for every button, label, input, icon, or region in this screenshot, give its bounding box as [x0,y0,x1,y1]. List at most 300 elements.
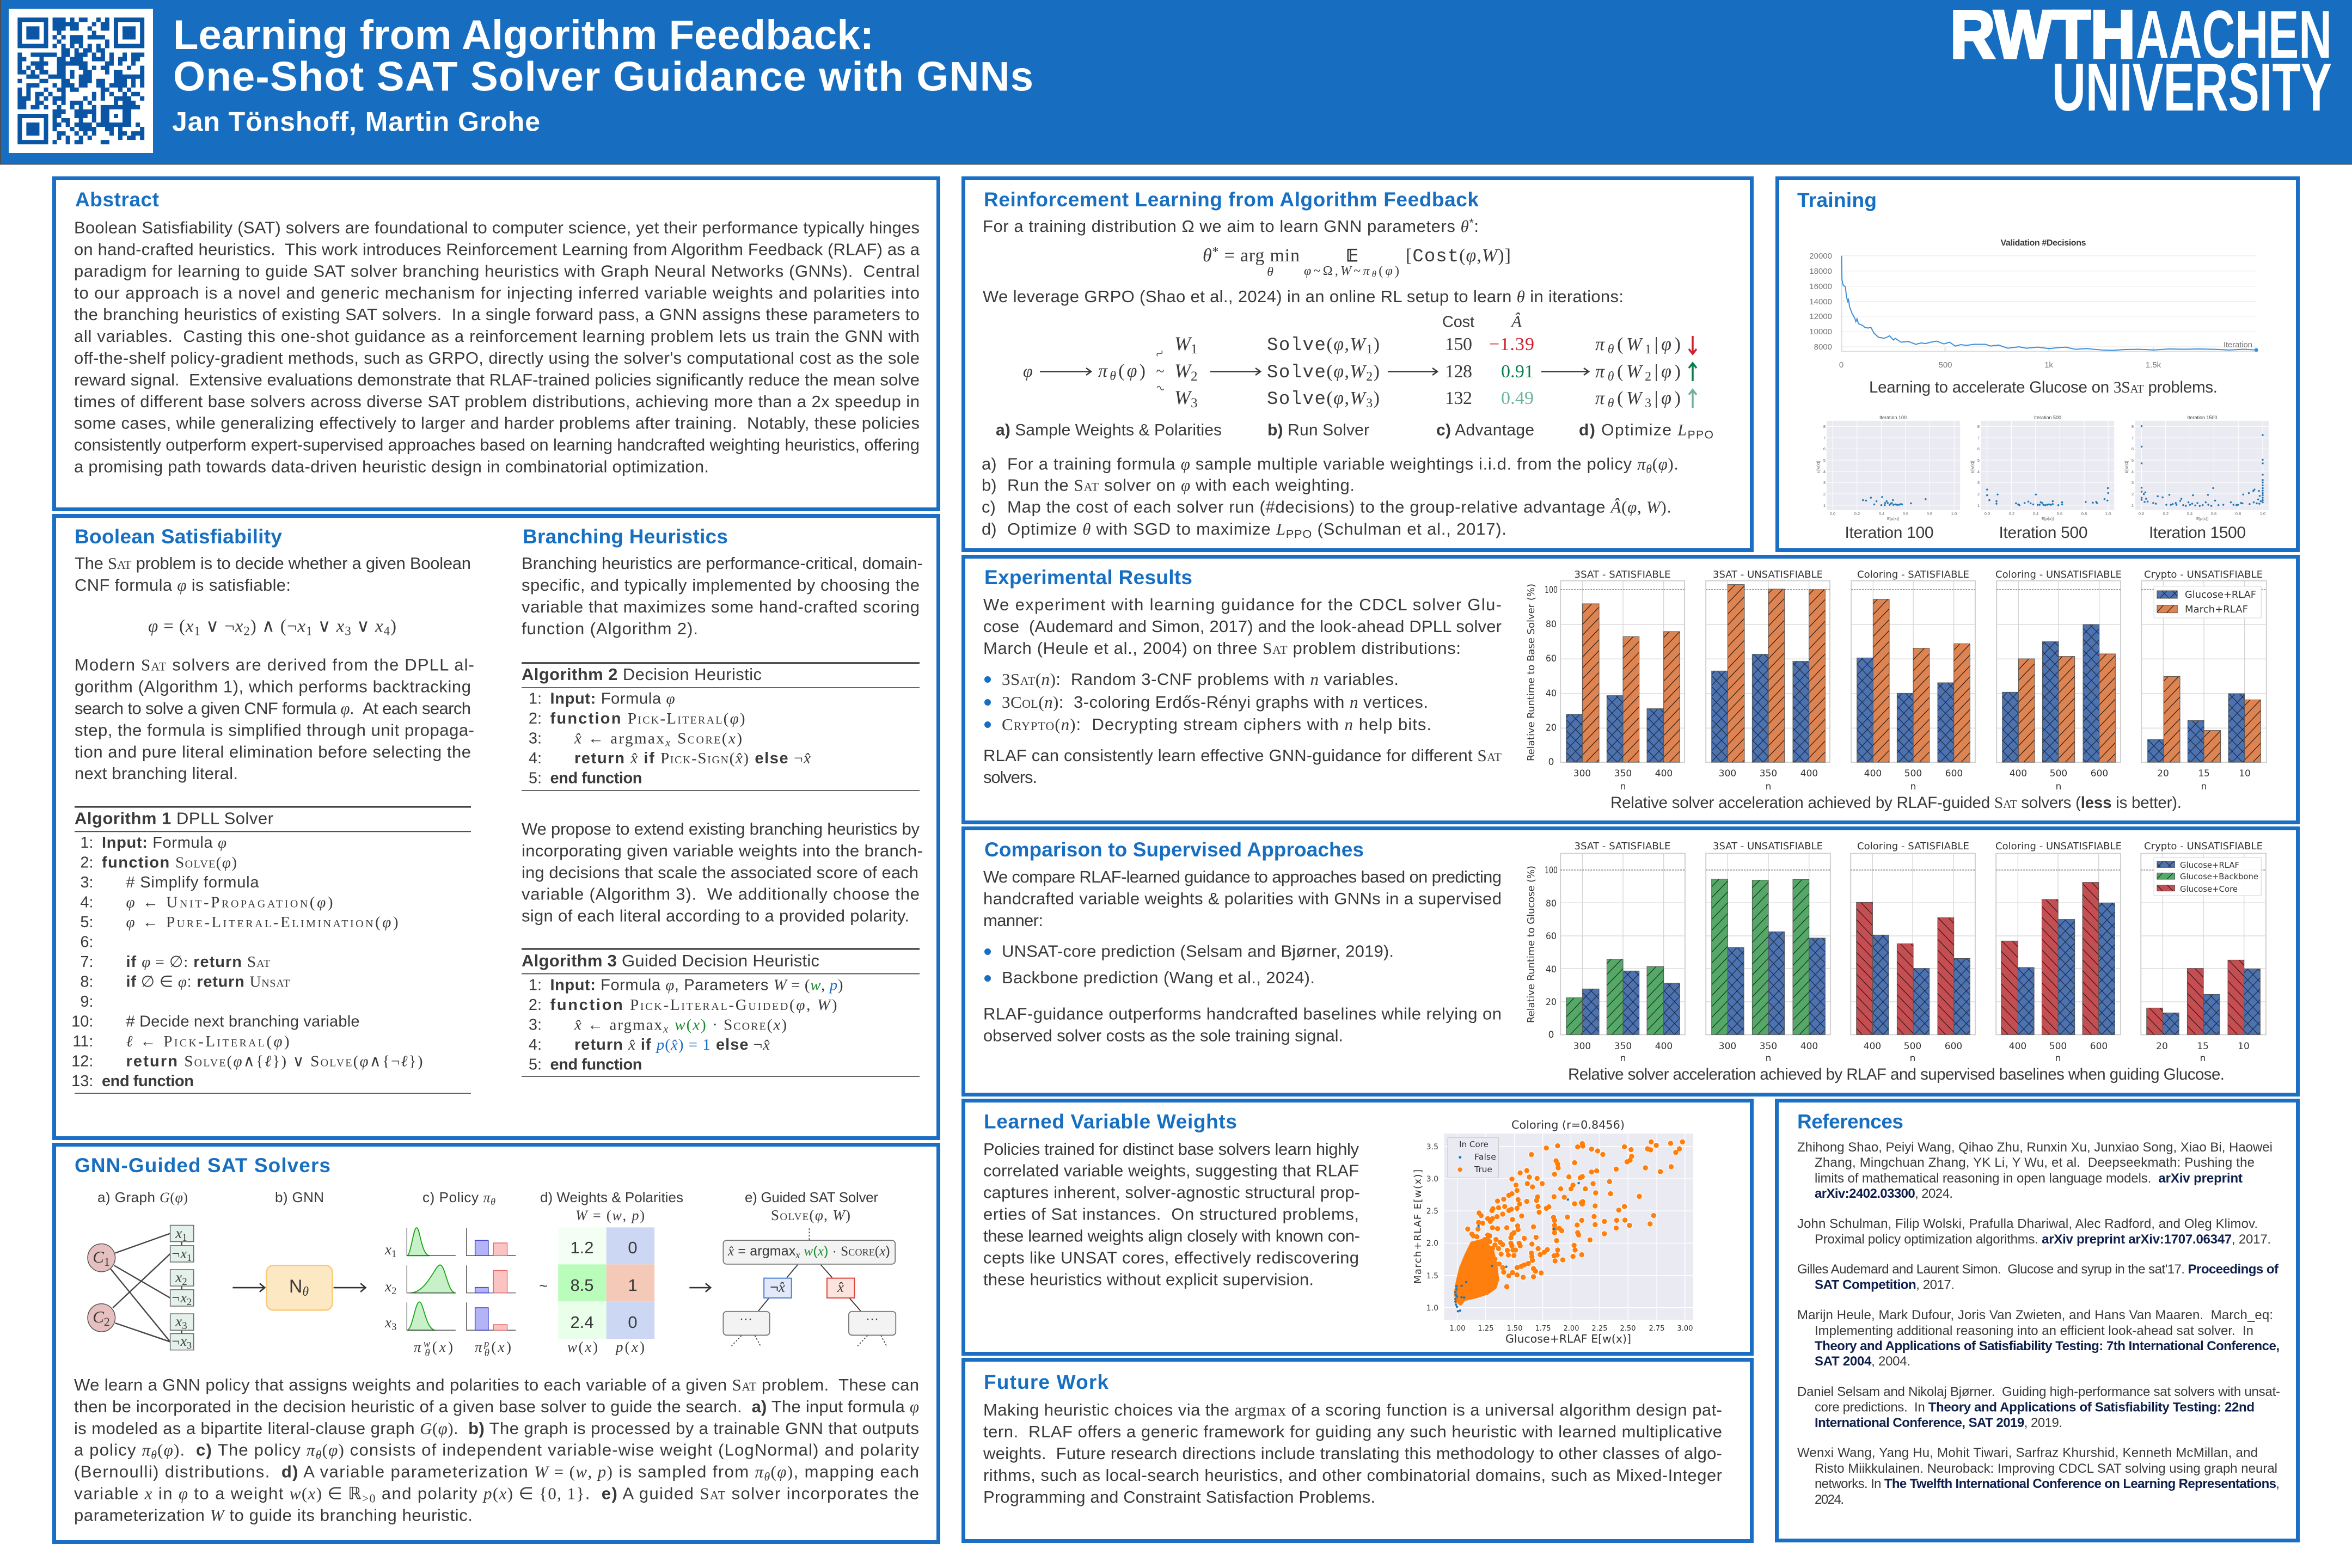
scatter: iteration 500: 7 [1977,436,1980,440]
panel: experimental results [964,556,2298,1541]
proposal text: ing decisions that scale the associated score of each [522,863,918,882]
reference: Heule et al.: Theory and Applications of Satisfiability Testing: 7th International Conference, [1815,1339,2280,1353]
reference: Audemard and Simon [1797,1262,2279,1293]
diagram math labels: 3 [187,1340,192,1351]
algorithm 1: ℓ ← Pick-Literal(φ) [126,1033,290,1050]
legend and axis text: n [1910,781,1916,792]
objective formula: = arg min [1219,246,1300,266]
scatter: iteration 500: E[w(x)] [1970,461,1975,474]
legend and axis text: 300 [1573,1041,1591,1052]
RL pipeline diagram: ( [1118,361,1124,381]
diagram math labels: ¬x̂ [770,1279,785,1295]
RL pipeline diagram: ( [1617,334,1623,354]
abstract body text: paradigm for learning to guide SAT solver branching heuristics with Graph Neural Networks (GNNs). Central [74,261,920,280]
panel: comparison to supervised approaches [964,829,2298,1541]
algorithm 3: w [675,1016,685,1034]
results intro: We experiment with learning guidance for the CDCL solver Glu- [983,595,1502,614]
diagram math labels: C [93,1307,104,1326]
QR code [9,9,153,153]
GNN body text: ( [322,1441,328,1460]
algorithm 2: return x̂ if Pick-Sign(x̂) else ¬x̂ [574,750,811,767]
panel: boolean satisfiability and branching heuristics [54,516,939,1138]
diagram math labels: 1 [104,1255,110,1269]
poster title [173,12,1033,100]
legend and axis text: n [2056,781,2061,792]
subplot: coloring unsatisfiable [1996,581,2121,762]
scatter: iteration 500: 0.2 [2009,511,2014,516]
legend and axis text [1526,569,2263,792]
subplot: 3SAT satisfiable [1560,581,1685,762]
reference: Shao et al.: arXiv:2402.03300, 2024. [1815,1186,1953,1201]
RL pipeline diagram: π [1595,388,1605,408]
diagram math labels: 2 [187,1296,192,1307]
scatter: iteration 1500: 8 [2132,424,2134,429]
RL pipeline diagram: 128 [1445,362,1472,382]
scatter: iteration 1500: Iteration 1500 [2187,415,2218,420]
legend and axis text: n [2201,781,2207,792]
algorithm 3: 2: [529,996,542,1014]
RL pipeline diagram: ~ [1152,344,1168,363]
RL pipeline diagram: 1 [1366,342,1373,357]
proposal text: incorporating given variable weights into the branch- [522,841,923,860]
diagram math labels: θ [425,1347,430,1359]
legend and axis text: 500 [2050,768,2067,779]
step explanations: c) [982,497,996,516]
RL pipeline diagram: 3 [1366,396,1373,411]
results conclusion [983,746,1502,787]
scatter plot: coloring correlation [1412,1118,1693,1345]
validation line chart: 12000 [1809,312,1832,321]
RL pipeline diagram: 150 [1445,334,1472,354]
scatter: iteration 1500: E[p(x)] [2196,516,2208,521]
RL pipeline diagram: ) [1374,334,1380,354]
GNN body text: a policy π [74,1441,150,1460]
abstract body text: off-the-shelf policy-gradient methods, such as GRPO, directly using the solver's computational cost as the sole [74,348,920,367]
comparison conclusion: observed solver costs as the sole training signal. [983,1026,1343,1045]
diagram math labels [93,1225,890,1359]
legend and axis text: 400 [1864,1041,1881,1052]
algorithm 2: x [665,737,670,749]
diagram math labels: 0 [628,1313,638,1332]
caption: iteration 500: Iteration 500 [1999,524,2087,542]
diagram math labels: 2 [391,1285,396,1297]
abstract body text: Boolean Satisfiability (SAT) solvers are foundational to computer science, yet their performance typically hinges [74,218,920,237]
scatter: iteration 500: 1 [1977,503,1980,508]
learned weights text: correlated variable weights, suggesting that RLAF [983,1161,1359,1180]
future work text: rithms, such as local-search heuristics, and other combinatorial domains, such as Mixed-Integer [983,1466,1722,1485]
validation line chart: 18000 [1809,267,1832,276]
RL pipeline diagram: 2 [1191,369,1198,384]
learned weights text: captures inherent, solver-agnostic structural prop- [983,1183,1360,1202]
blue points: not in core [1455,1183,1579,1311]
poster title: Learning from Algorithm Feedback: [173,12,874,58]
scatter: iteration 500: 0.4 [2033,511,2038,516]
RL pipeline diagram: W [1626,334,1643,354]
subplot: 3SAT satisfiable [1560,854,1685,1034]
objective formula: [Cost(φ,W)] [1406,246,1511,267]
scatter plot: coloring correlation: 2.5 [1426,1207,1438,1216]
legend and axis text: 15 [2198,768,2210,779]
reference: Audemard and Simon: Gilles Audemard and Laurent Simon. Glucose and syrup in the sat'17. Proceedings of [1797,1262,2279,1277]
graph edges [111,1234,182,1342]
GRPO sentence: We leverage GRPO (Shao et al., 2024) in an online RL setup to learn θ in iterations: [983,287,1624,306]
legend and axis text: 400 [1655,768,1673,779]
diagram column labels: a) Graph G(φ) [97,1189,188,1205]
legend and axis text: 350 [1614,768,1632,779]
step explanations: Run the Sat solver on φ with each weighting. [1007,476,1355,494]
future work text [983,1400,1722,1506]
algorithm 2: Algorithm 2 Decision Heuristic [522,665,762,684]
CNF formula: 2 [243,624,250,638]
diagram math labels: 1 [628,1276,638,1295]
CNF formula: x [235,616,243,636]
algorithm 1: Input: Formula φ [102,834,226,852]
scatter: iteration 100: 3 [1823,480,1826,485]
solver tree [731,1228,887,1347]
reference: Heule et al.: SAT 2004, 2004. [1815,1354,1910,1369]
legend and axis text: 400 [1800,768,1818,779]
RWTH Aachen University logo [1950,0,2332,125]
CNF formula: ∨ [313,616,336,636]
intro text: CNF formula φ is satisfiable: [75,575,291,595]
reference: Shao et al.: Zhang, Mingchuan Zhang, YK Li, Y Wu, et al. Deepseekmath: Pushing the [1815,1155,2255,1170]
RL pipeline diagram: ) [1374,388,1380,408]
scatter: iteration 100: 5 [1823,458,1826,463]
comparison conclusion [983,1004,1502,1045]
scatter: iteration 500: 3 [1977,480,1980,485]
GNN body text: φ), mapping each [777,1462,919,1481]
scatter: iteration 100: 0.8 [1927,511,1932,516]
scatter: iteration 500: 4 [1977,469,1980,474]
objective formula: 𝔼 [1346,246,1358,265]
step explanations: PPO [1286,527,1312,541]
future work text: Programming and Constraint Satisfaction Problems. [983,1487,1375,1506]
heading: GNN-guided: GNN-Guided SAT Solvers [75,1154,330,1177]
step explanations: Optimize θ with SGD to maximize L [1007,519,1285,538]
diagram math labels: 1 [182,1232,187,1244]
scatter: iteration 500 [1970,415,2114,521]
heading: training: Training [1797,189,1877,211]
legend and axis text: 3SAT - SATISFIABLE [1575,841,1670,852]
scatter: iteration 100: 4 [1823,469,1826,474]
diagram column labels: W = (w, p) [575,1208,645,1223]
proposal text: variable (Algorithm 3). We additionally choose the [522,885,920,904]
GNN body text: p(x) ∈ {0, 1}. e) A guided Sat solver incorporates the [483,1484,919,1503]
legend and axis text: 0 [1548,1030,1554,1040]
legend and axis text: 40 [1546,964,1557,975]
heading: RLAF: Reinforcement Learning from Algorithm Feedback [984,188,1479,211]
policy weight distributions [407,1228,456,1330]
diagram math labels: 2.4 [570,1313,594,1332]
authors: Jan Tönshoff, Martin Grohe [172,107,540,137]
RL pipeline diagram: 3 [1645,396,1651,411]
algorithm 1: end function [102,1073,194,1090]
subplot: coloring satisfiable [1851,854,1975,1034]
scatter: iteration 1500: 0.8 [2235,511,2241,516]
diagram column labels: e) Guided SAT Solver [745,1189,878,1205]
RL pipeline diagram: 2 [1645,370,1651,384]
algorithm 2: end function [550,770,642,787]
RL pipeline diagram: 1 [1191,342,1198,357]
CNF formula: 3 [345,624,351,638]
algorithm 2: x̂ ← argmax [574,730,664,748]
RL pipeline diagram: W [1626,362,1643,382]
reference: Shao et al.: limits of mathematical reasoning in open language models. arXiv preprint [1815,1171,2243,1186]
abstract body text: to our approach is a novel and generic mechanism for injecting inferred variable weights and polarities into [74,283,920,302]
reference: Selsam and Bjorner: Daniel Selsam and Nikolaj Bjørner. Guiding high-performance sat solvers with unsat- [1797,1385,2280,1399]
branching text: variable that maximizes some hand-crafted scoring [522,597,920,616]
scatter: iteration 1500: 1.0 [2260,511,2265,516]
scatter: iteration 500: E[p(x)] [2042,516,2054,521]
scatter: iteration 1500: 2 [2132,492,2134,497]
diagram math labels: 1 [391,1248,396,1260]
scatter plot: coloring correlation: 3.00 [1677,1325,1693,1333]
subplot: coloring satisfiable [1851,581,1975,762]
subplot: 3SAT unsatisfiable [1706,854,1830,1034]
algorithm 2 [522,663,920,791]
algorithm 1: 2: [80,854,94,871]
validation line chart: 0 [1839,360,1843,370]
algorithm 2: Score( [677,730,727,748]
reference: Wang et al.: networks. In The Twelfth International Conference on Learning Representations, [1815,1477,2280,1491]
results conclusion: solvers. [983,768,1037,787]
step explanations: ( [1652,454,1658,473]
scatter plot: coloring correlation: 3.0 [1426,1175,1438,1184]
heading: comparison: Comparison to Supervised Approaches [984,838,1364,861]
step explanations: b) [982,476,997,494]
results conclusion: RLAF can consistently learn effective GNN-guidance for different Sat [983,746,1502,765]
diagram math labels: ( [491,1339,496,1355]
scatter: iteration 100: 7 [1823,436,1826,440]
algorithm 1: return Solve(φ∧{ℓ}) ∨ Solve(φ∧{¬ℓ}) [126,1052,422,1070]
RL pipeline diagram: W [1626,388,1643,408]
legend and axis text: 500 [1904,768,1922,779]
abstract body text: all variables. Casting this one-shot guidance as a reinforcement learning problem lets us train the GNN with [74,327,920,346]
legend and axis text: 300 [1719,768,1736,779]
reference: Shao et al.: Zhihong Shao, Peiyi Wang, Qihao Zhu, Runxin Xu, Junxiao Song, Xiao Bi, Haowei [1797,1140,2273,1155]
step explanations: Map the cost of each solver run (#decisions) to the group-relative advantage Â(φ, W). [1007,497,1671,516]
algorithm 1: function Solve(φ) [102,854,237,871]
validation line chart: 1.5k [2146,360,2161,370]
results intro: cose (Audemard and Simon, 2017) and the look-ahead DPLL solver [983,617,1502,636]
scatter: iteration 1500: 0.0 [2139,511,2144,516]
scatter: iteration 500: 0.0 [1984,511,1990,516]
legend and axis text: n [1766,1053,1771,1064]
scatter: iteration 500: 2 [1977,492,1980,497]
chart title: Validation #Decisions [2000,238,2086,248]
scatter: iteration 500: Iteration 500 [2034,415,2061,420]
diagram math labels: π [475,1339,482,1355]
legend and axis text: 100 [1545,865,1558,876]
caption: iteration 100: Iteration 100 [1845,524,1934,542]
RL pipeline diagram: −1.39 [1489,334,1534,354]
distribution bullets: 3Sat(n): Random 3-CNF problems with n variables. [1002,670,1399,689]
RL pipeline diagram: θ [1110,369,1116,383]
RL pipeline diagram [1023,311,1696,411]
validation line chart: 500 [1938,360,1952,370]
RL intro: : [1474,217,1479,236]
diagram math labels: x̂ [837,1279,844,1295]
RL pipeline diagram: Solve(φ,W [1267,362,1365,383]
abstract body text: a promising path towards data-driven heuristic design in combinatorial optimization. [74,457,709,476]
learned weights text: cepts like UNSAT cores, effectively rediscovering [983,1248,1359,1267]
scatter: iteration 100: 6 [1823,446,1826,451]
diagram math labels: ~ [539,1278,548,1294]
algorithm 1: Algorithm 1 DPLL Solver [75,809,273,828]
reference: Wang et al. [1797,1445,2280,1507]
diagram math labels: 8.5 [570,1276,594,1295]
GNN body text: θ [764,1471,770,1484]
scatter: iteration 500: 0.6 [2057,511,2062,516]
RL pipeline diagram: π [1595,362,1605,382]
legend and axis text: Glucose+RLAF [2185,589,2256,601]
diagram math labels: θ [485,1347,489,1359]
diagram math labels: ··· [739,1312,752,1326]
future work text: Making heuristic choices via the argmax of a scoring function is a universal algorithm design pat- [983,1400,1722,1419]
legend and axis text: 20 [1546,722,1557,733]
reference: Wang et al.: Risto Miikkulainen. Neuroback: Improving CDCL SAT solving using graph neural [1815,1461,2277,1476]
GNN body text: φ) consists of independent variable-wise weight (LogNormal) and polarity [328,1441,919,1460]
diagram math labels: 2 [182,1276,187,1288]
validation line chart: Iteration [2224,340,2252,350]
panel: GNN-guided SAT solvers [54,1144,939,1542]
legend box [1448,1137,1498,1178]
algorithm 1: 4: [80,893,94,911]
GNN body text: φ). c) The policy π [164,1441,315,1460]
scatter: iteration 1500: 7 [2132,436,2134,440]
legend and axis text: 400 [2010,768,2027,779]
RL pipeline diagram: φ [1023,361,1033,381]
panel: training [1777,179,2298,550]
RL pipeline diagram: | [1655,334,1658,354]
step explanations: θ [1646,462,1652,475]
legend and axis text: 600 [2090,1041,2108,1052]
CNF formula: 4 [384,624,390,638]
legend and axis text: Coloring - SATISFIABLE [1857,841,1969,852]
proposal text [522,819,923,926]
reference: Shao et al. [1797,1140,2273,1201]
DPLL text: next branching literal. [75,764,238,783]
diagram column labels: c) Policy π [422,1189,490,1205]
scatter: iteration 1500: 5 [2132,458,2134,463]
objective formula: θ [1203,246,1212,266]
legend and axis text: 3SAT - UNSATISFIABLE [1713,841,1823,852]
scatter plot: coloring correlation: 1.50 [1507,1325,1522,1333]
diagram math labels: ¬x [171,1246,187,1261]
distribution bullets [984,670,1431,734]
step explanations: d) [982,519,997,538]
panel: abstract [54,179,939,510]
baseline bullets: UNSAT-core prediction (Selsam and Bjørner, 2019). [1002,942,1394,960]
branching text [522,554,923,638]
scatter plot: coloring correlation: Glucose+RLAF E[w(x)] [1505,1332,1631,1345]
algorithm 3: return x̂ if p(x̂) = 1 else ¬x̂ [574,1036,770,1054]
diagram drawing a-e [88,1225,896,1350]
legend and axis text: 600 [2091,768,2108,779]
reference: Audemard and Simon: SAT Competition, 2017. [1815,1277,1955,1293]
reference: Schulman et al.: John Schulman, Filip Wolski, Prafulla Dhariwal, Alec Radford, and Oleg Klimov. [1797,1216,2258,1232]
heading: boolean satisfiability: Boolean Satisfiability [75,525,282,548]
caption: iteration 1500: Iteration 1500 [2149,524,2246,542]
legend and axis text: 400 [2009,1041,2026,1052]
weight and polarity table [558,1227,654,1339]
RL pipeline diagram: φ) [1127,361,1146,381]
step explanations: (Schulman et al., 2017). [1312,519,1506,538]
GNN body text: variable x in φ to a weight w(x) ∈ ℝ [74,1484,362,1503]
legend and axis text: 500 [1904,1041,1921,1052]
diagram math labels: 3 [182,1320,187,1332]
reference: Schulman et al. [1797,1216,2271,1247]
legend and axis text: 20 [2157,768,2169,779]
legend and axis text: Coloring - SATISFIABLE [1857,569,1969,580]
scatter: iteration 100: 0.6 [1903,511,1908,516]
algorithm 1: 6: [80,933,94,951]
GNN body text: and polarity [376,1484,483,1503]
GNN body text: θ [316,1449,322,1462]
legend and axis text: 3SAT - UNSATISFIABLE [1713,569,1823,580]
GNN body text: is modeled as a bipartite literal-clause graph G(φ). b) The graph is processed by a trainable GNN that outputs [74,1419,919,1438]
policy axes [407,1228,516,1330]
diagram math labels: x̂ = argmax [728,1244,795,1259]
objective formula: θ [1267,265,1273,279]
legend and axis text: 600 [1945,1041,1962,1052]
objective formula: φ) [1385,264,1399,278]
GNN body text: We learn a GNN policy that assigns weights and polarities to each variable of a given Sat problem. These can [74,1375,919,1394]
algorithm 3: 3: [529,1016,542,1034]
branching text: specific, and typically implemented by choosing the [522,575,920,595]
GNN body text: parameterization W to guide its branching heuristic. [74,1506,473,1525]
diagram math labels: x [175,1269,182,1285]
CNF formula: 1 [194,624,200,638]
comparison conclusion: RLAF-guidance outperforms handcrafted baselines while relying on [983,1004,1502,1024]
GNN body text: then be incorporated in the decision heuristic of a given base solver to guide the search. a) The input formula φ [74,1397,919,1416]
legend and axis text: 10 [2239,768,2251,779]
CNF formula: ) ∧ (¬ [250,616,297,636]
diagram math labels: 2 [104,1315,110,1328]
CNF formula: ) [390,616,396,636]
header banner [0,0,2352,164]
RL pipeline diagram: ) [1374,362,1380,382]
subplot: 3SAT unsatisfiable [1706,581,1830,762]
scatter plot: coloring correlation: True [1474,1165,1492,1174]
diagram math labels: w [804,1244,813,1259]
algorithm 3: (x) · Score(x) [687,1016,787,1034]
diagram math labels: ( [432,1339,437,1355]
RL pipeline diagram: φ) [1661,362,1681,382]
scatter: iteration 1500: 6 [2132,446,2134,451]
RL pipeline diagram: π [1098,361,1108,381]
diagram math labels: x [385,1314,391,1331]
chart caption: Learning to accelerate Glucose on 3Sat problems. [1869,378,2218,396]
scatter: iteration 100: 0.4 [1879,511,1884,516]
RL pipeline diagram: W [1174,387,1191,408]
polarity bars [475,1240,488,1330]
RL pipeline diagram: W [1174,333,1191,354]
scatter: iteration 100: Iteration 100 [1879,415,1907,420]
scatter: iteration 100: 1.0 [1951,511,1957,516]
comparison intro: We compare RLAF-learned guidance to approaches based on predicting [983,867,1502,886]
diagram math labels: x [385,1278,391,1295]
legend and axis text: 350 [1614,1041,1632,1052]
panel: future work [964,1360,1752,1541]
legend and axis text: 350 [1760,1041,1777,1052]
scatter: iteration 1500: E[w(x)] [2124,461,2129,474]
RL pipeline diagram: π [1595,334,1605,354]
legend and axis text: Relative Runtime to Base Solver (%) [1526,584,1537,761]
proposal text: We propose to extend existing branching heuristics by [522,819,920,838]
scatter: iteration 500: 8 [1977,424,1980,429]
CNF formula: x [375,616,383,636]
